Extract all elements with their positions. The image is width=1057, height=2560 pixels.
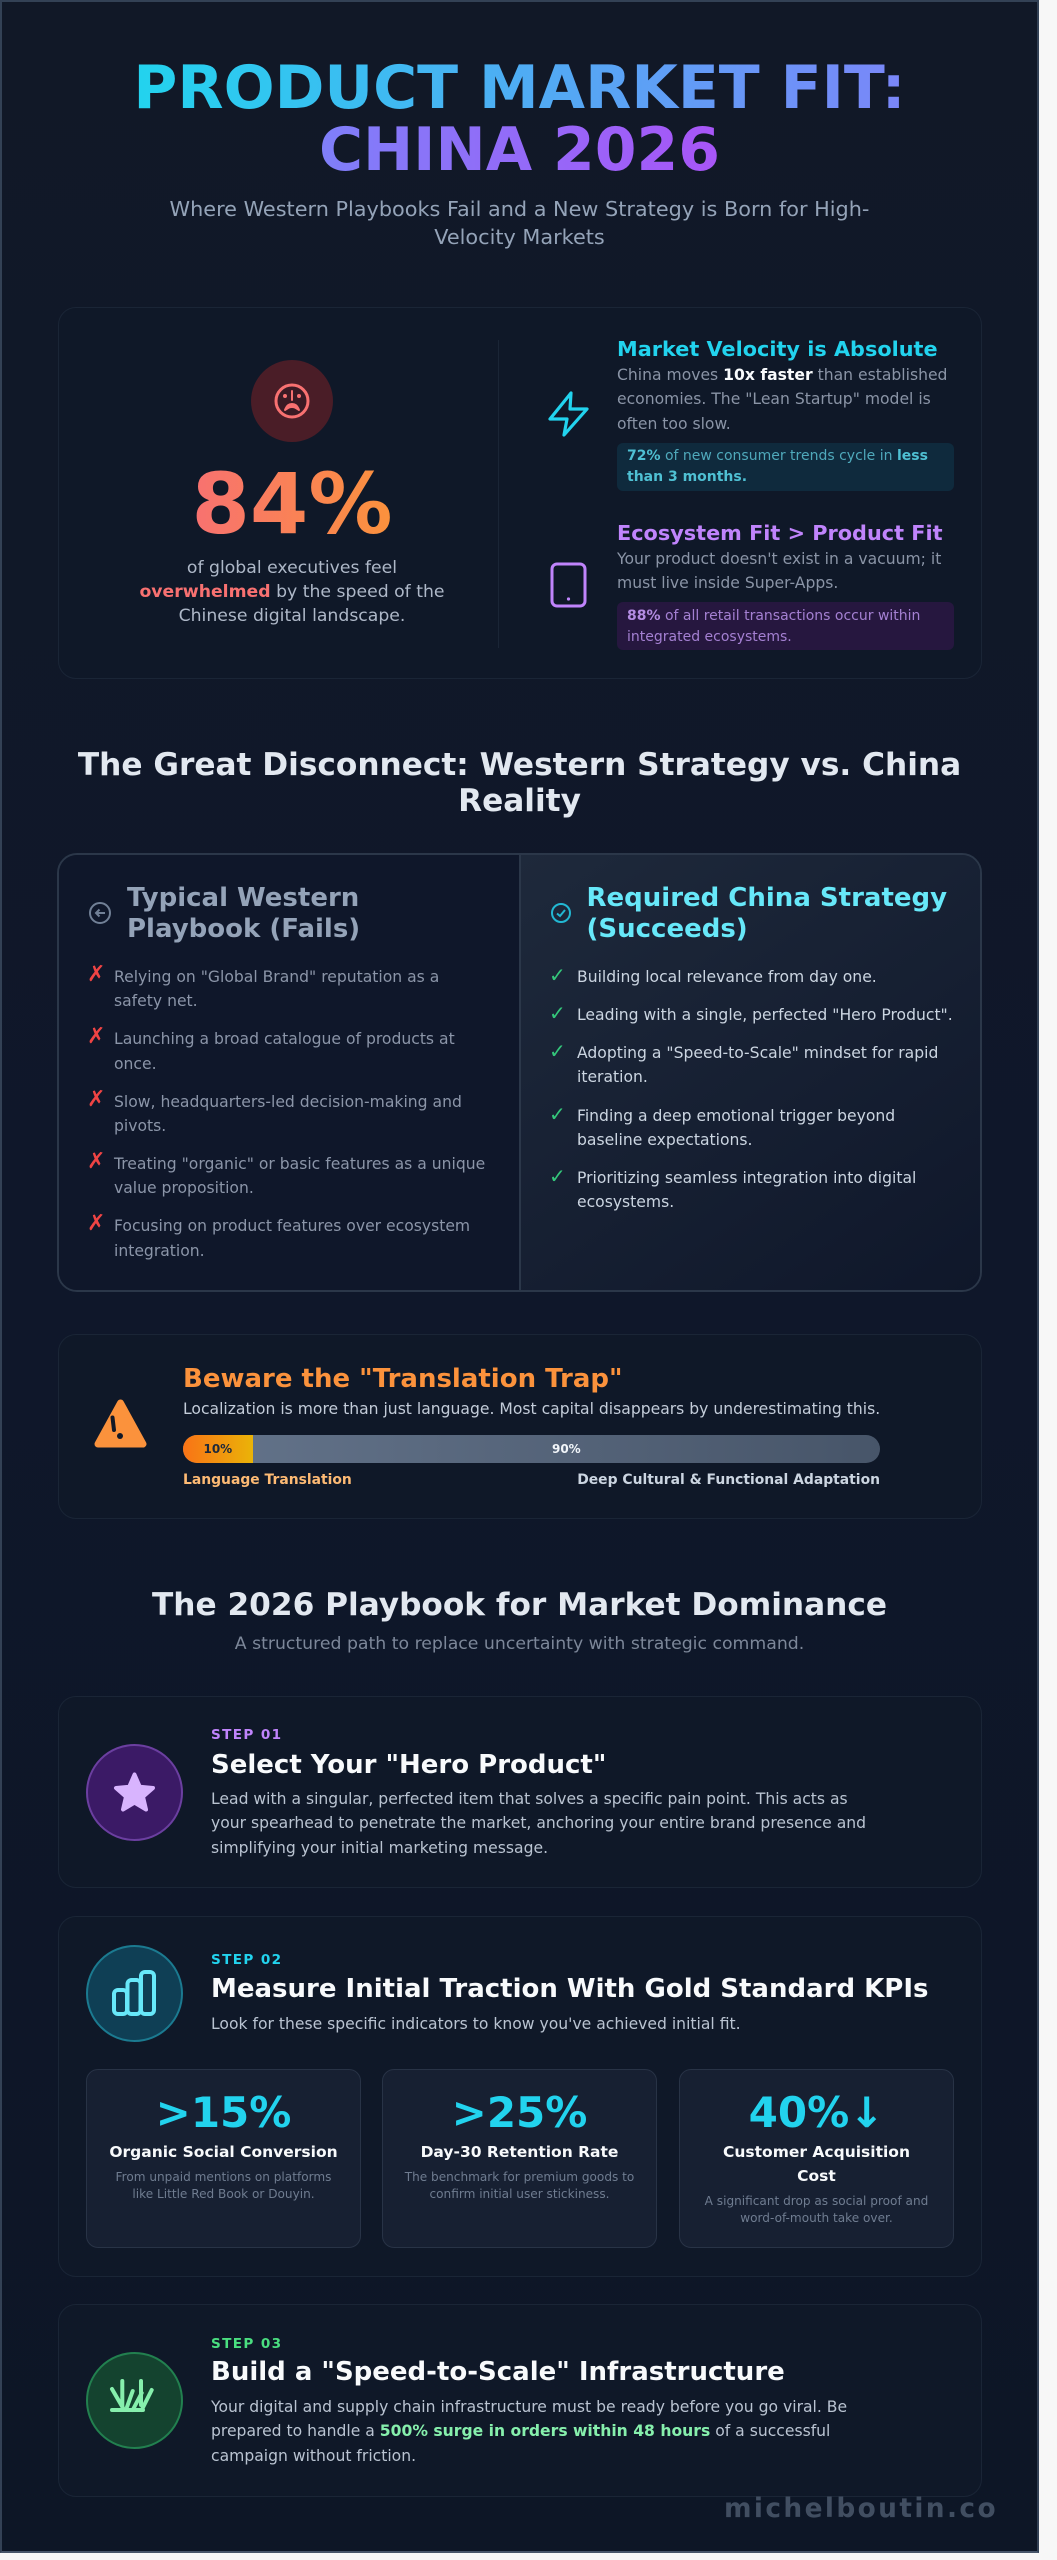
description [704,2194,928,2225]
heading: china strategy [586,882,947,944]
subtitle: Where Western Playbooks Fail and a New Strategy is Born for High- [170,197,869,221]
list item: ✗ [87,1024,105,1049]
callout: 88 percent: integrated ecosystems. [627,629,792,645]
list item: Prioritizing seamless integration into digital [577,1169,916,1187]
description: The benchmark for premium goods to [405,2170,634,2184]
callout: 72 percent: 72% of new consumer trends cycle in less [627,448,928,464]
description [116,2170,331,2201]
heading: ecosystem fit: Ecosystem Fit > Product Fit [617,520,943,544]
heading: western playbook: Typical Western [127,882,359,912]
heading: china strategy: Required China Strategy [586,882,947,912]
icon: back arrow circle [89,902,111,924]
stat: 84 percent: 84% [191,455,393,553]
list item [549,1164,916,1211]
heading: western playbook [127,882,360,944]
icon: overwhelmed face [251,360,333,442]
bar segment: 10 percent: 10% [203,1442,232,1456]
list item [87,1087,462,1135]
list item [549,1102,895,1149]
watermark: michelboutin.co [724,2493,998,2524]
text: market velocity [617,366,947,433]
list item: Relying on "Global Brand" reputation as a [114,968,439,986]
heading: step 3: Build a "Speed-to-Scale" Infrastructure [211,2357,785,2387]
list item [87,1211,470,1260]
heading: great disconnect [78,747,961,819]
panel: key stats [58,307,982,679]
list item: Launching a broad catalogue of products at [114,1030,455,1048]
text: step 1 [211,1790,866,1857]
description: word-of-mouth take over. [740,2211,893,2225]
list item: pivots. [114,1117,166,1135]
text: step 1: simplifying your initial marketing message. [211,1839,548,1857]
description: like Little Red Book or Douyin. [132,2187,315,2201]
icon: lightning bolt [548,391,589,437]
panel: comparison [57,853,982,1292]
list item: ✓ [549,1001,566,1025]
title: PRODUCT MARKET FIT: [133,53,906,123]
heading: market velocity: Market Velocity is Absolute [617,336,938,360]
list item: ✓ [549,1102,566,1126]
text: step 3: Your digital and supply chain infrastructure must be ready before you go viral. Be [211,2398,847,2416]
heading: china strategy: (Succeeds) [586,914,748,944]
card: acquisition cost [679,2069,954,2248]
list item: Slow, headquarters-led decision-making and [114,1093,462,1111]
text: step 1: your spearhead to penetrate the market, anchoring your entire brand presence and [211,1814,866,1832]
label: Customer Acquisition [723,2143,910,2161]
list item: ✗ [87,962,105,987]
text: stat description: of global executives feel [187,558,397,578]
list item: value proposition. [114,1179,254,1197]
text: market velocity: often too slow. [617,415,731,433]
text: market velocity: economies. The "Lean Startup" model is [617,390,931,408]
text: step 1: Lead with a singular, perfected item that solves a specific pain point. This acts as [211,1790,848,1808]
bar segment: 10 percent [183,1435,253,1463]
description [404,2170,634,2201]
icon: bars badge [86,1945,183,2042]
list item: Finding a deep emotional trigger beyond [577,1106,895,1124]
label: step 01: STEP 01 [211,1727,282,1743]
label: step 02: STEP 02 [211,1952,282,1968]
title [133,53,906,185]
list item: Leading with a single, perfected "Hero Product". [577,1006,953,1024]
description: A significant drop as social proof and [705,2194,928,2208]
heading: great disconnect: The Great Disconnect: Western Strategy vs. China [78,747,961,783]
text: ecosystem fit [617,550,941,592]
list item: ✓ [549,1039,566,1063]
card: organic conversion [86,2069,361,2248]
icon: star badge [86,1744,183,1841]
callout: 88 percent [617,602,954,650]
text: step 3: campaign without friction. [211,2447,416,2465]
text: step 2: Look for these specific indicators to know you've achieved initial fit. [211,2015,741,2033]
text: stat description [139,558,445,626]
number: >25% [452,2088,587,2137]
list item [87,962,439,1010]
subtitle: Velocity Markets [434,225,605,249]
list item: Adopting a "Speed-to-Scale" mindset for rapid [577,1044,938,1062]
heading: western playbook: Playbook (Fails) [127,914,360,944]
panel: step 3 [58,2304,982,2497]
text: translation trap: Localization is more than just language. Most capital disappears by underestimating this. [183,1400,880,1418]
text: step 3 [211,2398,847,2465]
icon: grass badge [86,2352,183,2449]
list item [549,1039,938,1086]
list: china strategies [549,963,953,1211]
callout: 72 percent [617,443,954,491]
list item: iteration. [577,1068,648,1086]
number: 40%↓ [749,2088,884,2137]
list item: ✓ [549,963,566,987]
list: western failures [87,962,485,1260]
list item: Treating "organic" or basic features as a unique [114,1155,485,1173]
list item [549,963,877,987]
list item [87,1024,455,1073]
label: Organic Social Conversion [109,2143,338,2161]
list item: Focusing on product features over ecosystem [114,1217,470,1235]
heading: step 2: Measure Initial Traction With Gold Standard KPIs [211,1974,928,2004]
callout: 88 percent: 88% of all retail transactions occur within [627,608,920,624]
list item: integration. [114,1242,205,1260]
panel: translation trap [58,1334,982,1519]
heading: step 1: Select Your "Hero Product" [211,1750,606,1780]
list item: baseline expectations. [577,1131,753,1149]
icon: phone [550,562,586,608]
panel: western column [59,855,520,1290]
text: playbook subtitle: A structured path to replace uncertainty with strategic command. [235,1634,804,1654]
card: retention rate [382,2069,657,2248]
chart: 10/90 stacked bar [183,1435,880,1463]
panel: china column [519,855,980,1290]
text: stat description: overwhelmed by the speed of the [139,582,445,602]
description: confirm initial user stickiness. [429,2187,610,2201]
list item: ecosystems. [577,1193,674,1211]
label: language translation: Language Translation [183,1472,352,1488]
callout: 72 percent: than 3 months. [627,469,747,485]
divider [498,340,499,648]
text: ecosystem fit: must live inside Super-Apps. [617,574,838,592]
label [723,2143,910,2185]
label: Day-30 Retention Rate [421,2143,618,2161]
text: step 3: prepared to handle a 500% surge in orders within 48 hours of a successful [211,2422,830,2440]
list item: ✗ [87,1211,105,1236]
description: From unpaid mentions on platforms [116,2170,331,2184]
label: cultural adaptation: Deep Cultural & Functional Adaptation [577,1472,880,1488]
list item [549,1001,953,1025]
text: stat description: Chinese digital landscape. [179,606,405,626]
heading: translation trap: Beware the "Translation Trap" [183,1364,623,1394]
subtitle [170,197,869,249]
list item: safety net. [114,992,198,1010]
list item: Building local relevance from day one. [577,968,877,986]
panel: step 1 [58,1696,982,1888]
bar segment: 90 percent: 90% [552,1442,581,1456]
list item: ✓ [549,1164,566,1188]
list item: ✗ [87,1087,105,1112]
panel: step 2 [58,1916,982,2277]
heading: great disconnect: Reality [458,783,581,819]
list item: once. [114,1055,157,1073]
text: market velocity: China moves 10x faster than established [617,366,947,384]
heading: playbook: The 2026 Playbook for Market Dominance [152,1587,887,1623]
icon: check circle [551,903,571,923]
icon: warning triangle [94,1400,146,1448]
list item: ✗ [87,1149,105,1174]
label: step 03: STEP 03 [211,2336,282,2352]
title: CHINA 2026 [319,115,720,185]
number: >15% [156,2088,291,2137]
text: ecosystem fit: Your product doesn't exist in a vacuum; it [617,550,941,568]
label: Cost [797,2167,836,2185]
list item [87,1149,485,1197]
